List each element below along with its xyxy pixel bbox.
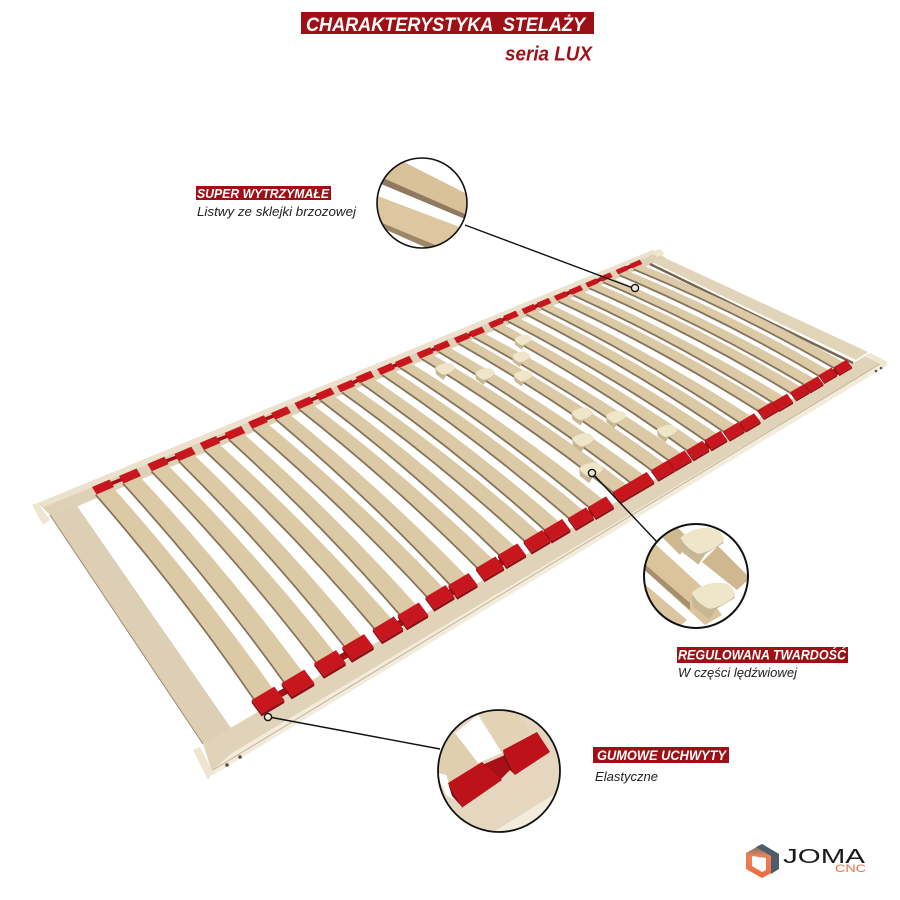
red rubber clips on front rail (252, 360, 852, 716)
icon: hexagonal cube (746, 844, 779, 878)
subtitle: seria LUX (505, 44, 594, 66)
logo: JOMA CNC: JOMA (783, 846, 866, 868)
red rubber clips on back rail (92, 260, 642, 494)
description: lumbar part: W części lędźwiowej (678, 665, 798, 680)
label: super wytrzymałe: SUPER WYTRZYMAŁE (197, 186, 329, 201)
logo: JOMA CNC (746, 844, 866, 878)
magnifier: rubber clip (437, 709, 561, 833)
callout line: clips (264, 713, 440, 749)
right crossbar (650, 257, 868, 363)
cream hardness adjusters (435, 335, 677, 483)
callout line: adjusters (588, 469, 657, 542)
back side rail (32, 249, 666, 525)
callout line: slats (465, 225, 639, 292)
logo: JOMA CNC: CNC (835, 863, 866, 875)
magnifier: hardness adjusters (643, 523, 749, 629)
front side rail (193, 353, 888, 780)
label: regulowana twardość: REGULOWANA TWARDOŚĆ (678, 646, 847, 662)
title banner: CHARAKTERYSTYKA STELAŻY (306, 13, 587, 36)
wooden slats (96, 264, 845, 708)
description: birch plywood slats: Listwy ze sklejki brzozowej (197, 205, 357, 219)
left crossbar (50, 506, 231, 744)
magnifier: birch slats (376, 157, 468, 249)
slatted bed frame (32, 249, 888, 780)
description: elastic: Elastyczne (595, 769, 658, 784)
label: gumowe uchwyty: GUMOWE UCHWYTY (597, 747, 728, 763)
